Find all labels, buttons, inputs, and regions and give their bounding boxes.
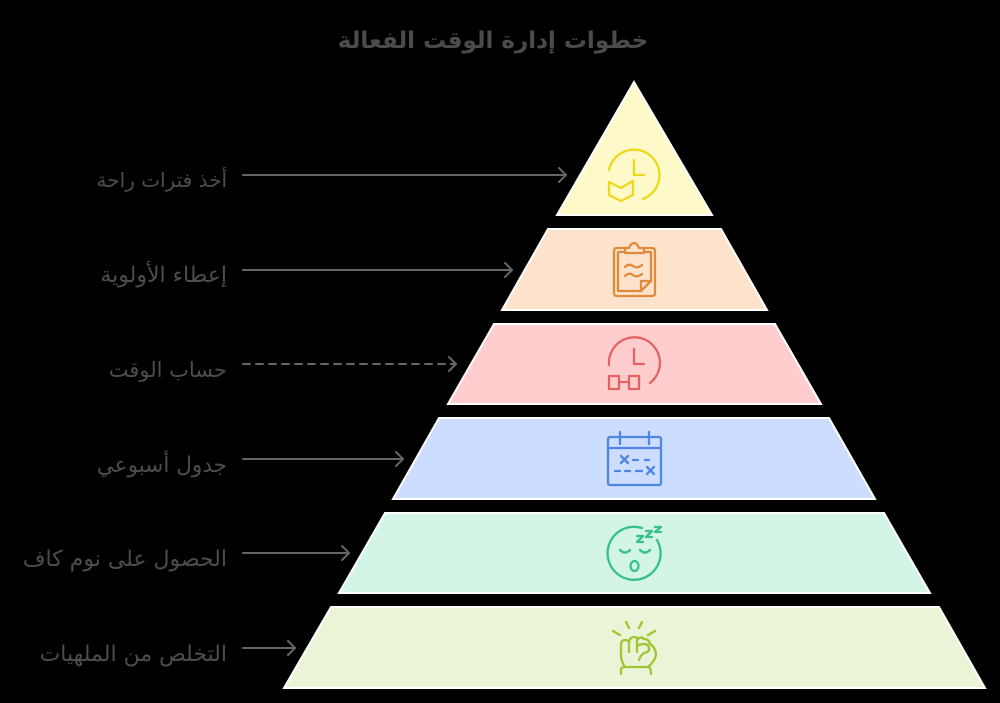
arrow: take breaks: [243, 168, 566, 182]
icon: clipboard: [614, 243, 655, 296]
pyramid tier: time tracking: [448, 324, 821, 404]
label: weekly schedule: جدول أسبوعي: [97, 450, 227, 478]
icon: raised fist: [613, 622, 656, 674]
pyramid tier: eliminate distractions: [284, 607, 985, 688]
label: enough sleep: الحصول على نوم كاف: [23, 547, 227, 572]
label: prioritize: إعطاء الأولوية: [100, 261, 227, 288]
label: time tracking: حساب الوقت: [109, 358, 227, 382]
arrow: time tracking: [243, 357, 456, 371]
arrow: weekly schedule: [243, 452, 403, 466]
arrow: eliminate distractions: [243, 641, 295, 655]
icon: calendar: [608, 432, 661, 485]
icon: sleeping face: [608, 527, 661, 580]
arrow: enough sleep: [243, 546, 349, 560]
pyramid tier: weekly schedule: [393, 418, 875, 499]
pyramid tier: take breaks: [557, 82, 712, 215]
pyramid tier: enough sleep: [339, 513, 930, 593]
icon: clock with book: [609, 150, 659, 201]
title: خطوات إدارة الوقت الفعالة: [338, 28, 648, 54]
pyramid tier: prioritize: [502, 229, 767, 310]
label: eliminate distractions: التخلص من الملهيات: [40, 642, 227, 667]
arrow: prioritize: [243, 263, 512, 277]
icon: clock with dumbbell: [609, 337, 660, 389]
label: take breaks: أخذ فترات راحة: [97, 167, 227, 192]
